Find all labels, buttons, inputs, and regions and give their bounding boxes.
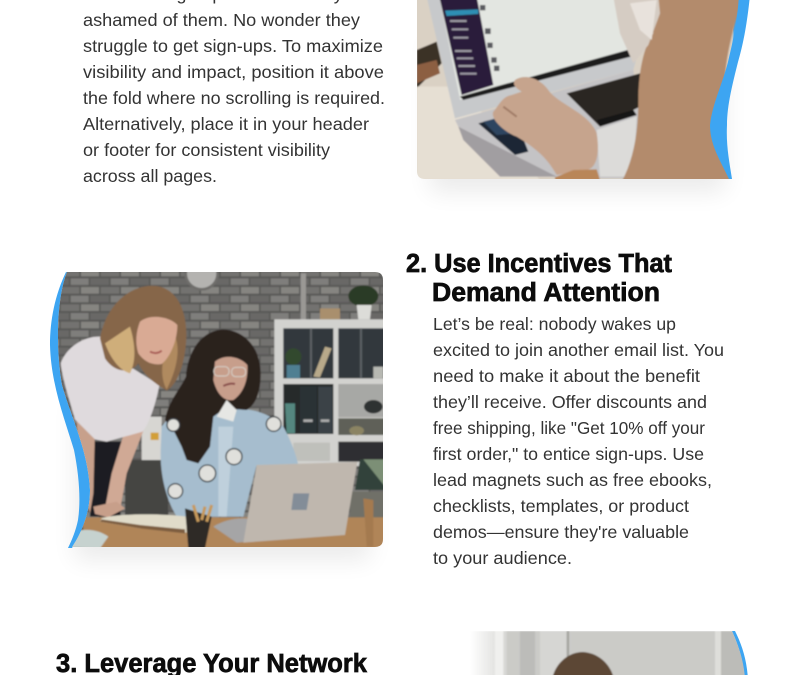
heading: tip 2: Demand Attention	[432, 279, 660, 307]
text block: tip 1 body: or footer for consistent visibility	[83, 140, 330, 160]
color swatch	[70, 530, 108, 548]
text block: tip 2 body	[433, 314, 724, 568]
text block: tip 1 body: ashamed of them. No wonder they	[83, 10, 360, 30]
book	[100, 514, 187, 533]
woman 2 shirt	[161, 409, 298, 517]
text block: tip 2 body: to your audience.	[433, 548, 572, 568]
image: person by a window with blue wave edge	[470, 631, 748, 675]
woman 1 legs and skirt	[90, 442, 123, 517]
text block: tip 1 body: struggle to get sign-ups. To maximize	[83, 36, 383, 56]
text block: tip 1 body: across all pages.	[83, 166, 217, 186]
base	[455, 70, 640, 178]
text block: tip 2 body: checklists, templates, or product	[433, 496, 689, 516]
heading: tip 2: 2. Use Incentives That	[406, 250, 672, 278]
shirt polka dots	[167, 417, 281, 498]
text block: tip 2 body: free shipping, like "Get 10% off your	[433, 418, 705, 438]
image: hand typing on a laptop with blue wave edge	[413, 0, 750, 192]
hand	[493, 77, 598, 175]
right side plant table	[355, 459, 385, 490]
text block: tip 1 body: visibility and impact, position it above	[83, 62, 384, 82]
pencil cup	[185, 508, 212, 548]
text block: tip 2 body: excited to join another email list. You	[433, 340, 724, 360]
woman 1 hair back	[100, 286, 186, 391]
laptop	[213, 518, 253, 543]
arm	[622, 0, 743, 182]
woman 2 hair	[165, 329, 261, 463]
shelves	[274, 319, 384, 466]
image: two women working at a laptop with blue wave edge	[47, 256, 387, 560]
plant, pot, vase	[348, 285, 378, 307]
heading: tip 2	[406, 250, 672, 307]
text block: tip 1 body	[83, 0, 385, 186]
desk	[83, 517, 387, 549]
text block: tip 2 body: demos—ensure they're valuable	[433, 522, 689, 542]
text block: tip 1 body: the fold where no scrolling is required.	[83, 88, 385, 108]
text block: tip 2 body: they’ll receive. Offer discounts and	[433, 392, 707, 412]
wall unit behind	[142, 417, 162, 460]
text block: tip 2 body: need to make it about the benefit	[433, 366, 700, 386]
woman 1 shirt	[61, 337, 159, 442]
watch	[555, 169, 600, 180]
text block: tip 2 body: Let’s be real: nobody wakes up	[433, 314, 676, 334]
clock	[185, 272, 220, 291]
laptop lid	[427, 0, 653, 118]
text block: tip 2 body: first order," to entice sign-ups. Use	[433, 444, 704, 464]
text block: tip 2 body: lead magnets such as free ebooks,	[433, 470, 712, 490]
woman 2 face	[213, 357, 247, 400]
text block: tip 1 body: Alternatively, place it in your header	[83, 114, 369, 134]
woman 1 face	[136, 317, 177, 364]
woman 1 arm	[77, 420, 95, 513]
